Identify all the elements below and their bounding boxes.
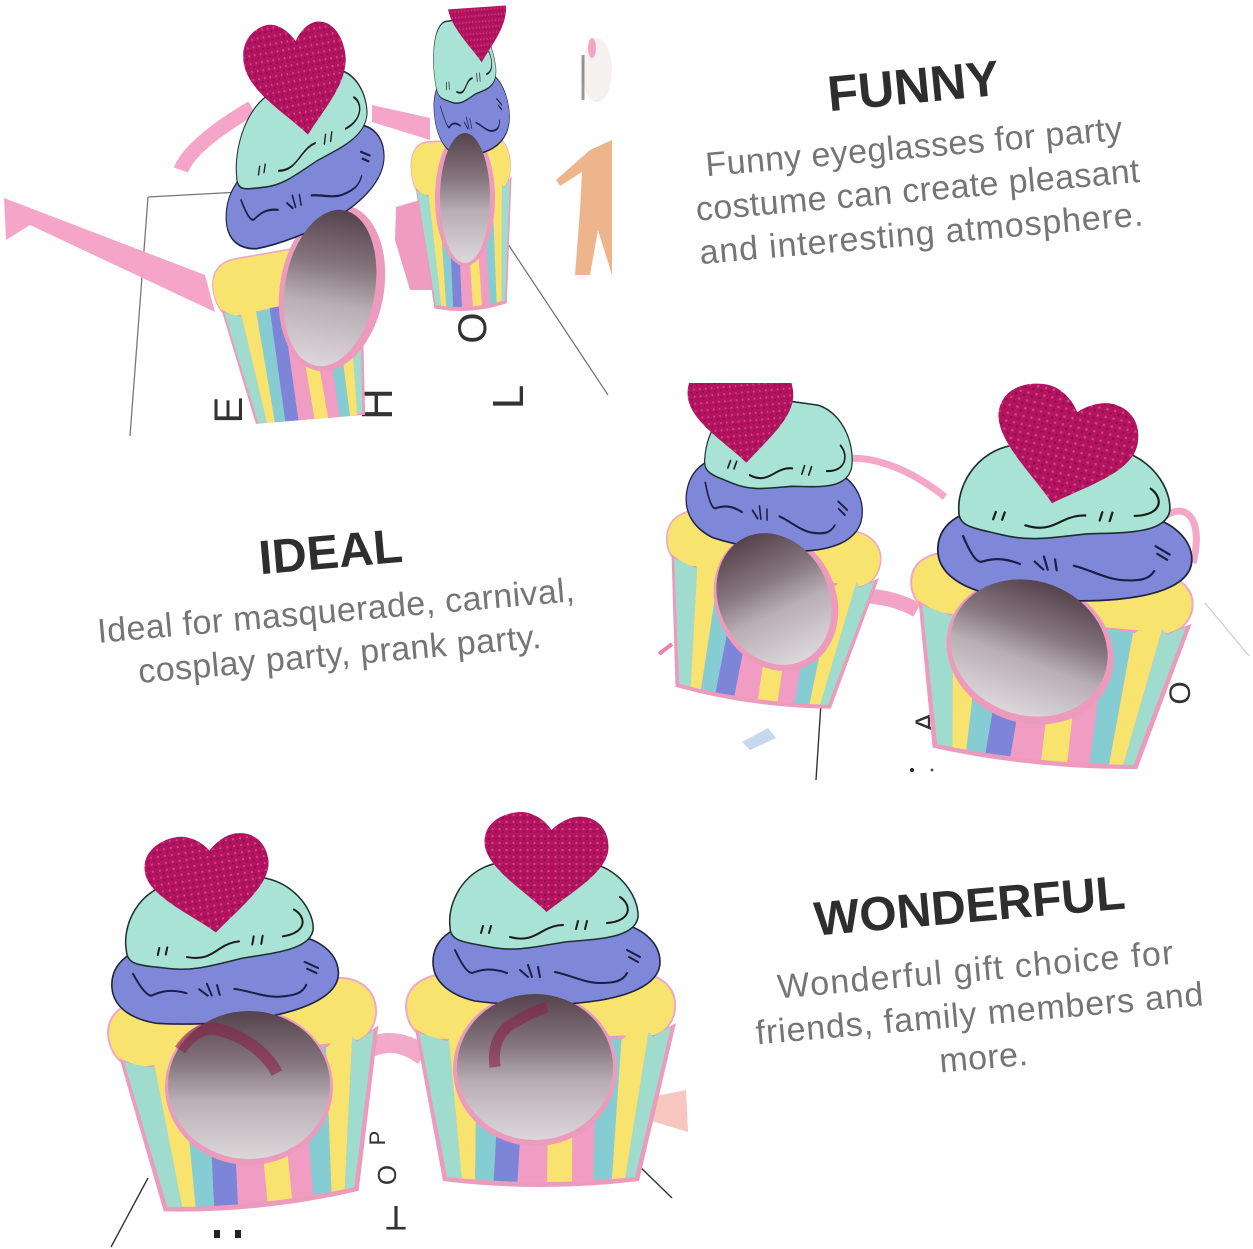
- paper marks and letters: O: [372, 1165, 402, 1185]
- text block: ideal description: cosplay party, prank party.: [137, 618, 543, 691]
- text block: funny description: costume can create pleasant: [694, 152, 1142, 229]
- glasses: angled view: [4, 0, 521, 447]
- paper marks and letters: A: [910, 712, 943, 732]
- text block: wonderful description: friends, family members and: [754, 975, 1206, 1052]
- text block: ideal description: Ideal for masquerade, carnival,: [96, 571, 576, 651]
- paper sheet with printed letters: H: [353, 388, 402, 420]
- paper sheet with printed letters: O: [451, 312, 495, 344]
- temple arms and bridge: [829, 458, 1196, 610]
- text block: funny description: Funny eyeglasses for party: [704, 110, 1124, 184]
- text block: funny description: and interesting atmosphere.: [698, 195, 1145, 272]
- paper sheet with printed letters: E: [207, 397, 251, 423]
- paper marks and letters: O: [1164, 681, 1197, 705]
- paper sheet with printed letters: [130, 192, 608, 436]
- glasses: left cupcake: [666, 383, 882, 709]
- paper marks and letters: T: [386, 1198, 406, 1236]
- heading: FUNNY: FUNNY: [825, 50, 1002, 122]
- paper marks and letters: P: [365, 1131, 390, 1145]
- text block: wonderful description: Wonderful gift choice for: [776, 934, 1176, 1006]
- photo panel: bottom glasses: [105, 812, 688, 1247]
- glasses: right cupcake: [910, 384, 1194, 770]
- text block: wonderful description: more.: [938, 1035, 1030, 1081]
- paper sheet with printed letters: L: [484, 385, 533, 409]
- glasses: right cupcake: [406, 812, 676, 1192]
- glasses: left cupcake: [105, 825, 397, 1227]
- photo panel: middle glasses: [645, 357, 1249, 784]
- glasses bridge: [356, 1043, 424, 1056]
- paper marks and letters: [659, 603, 1249, 780]
- doll figure: [556, 38, 612, 275]
- paper marks and letters: [111, 1090, 688, 1247]
- heading: IDEAL: IDEAL: [257, 520, 405, 585]
- photo panel: top glasses: [4, 0, 612, 447]
- heading: WONDERFUL: WONDERFUL: [812, 867, 1127, 947]
